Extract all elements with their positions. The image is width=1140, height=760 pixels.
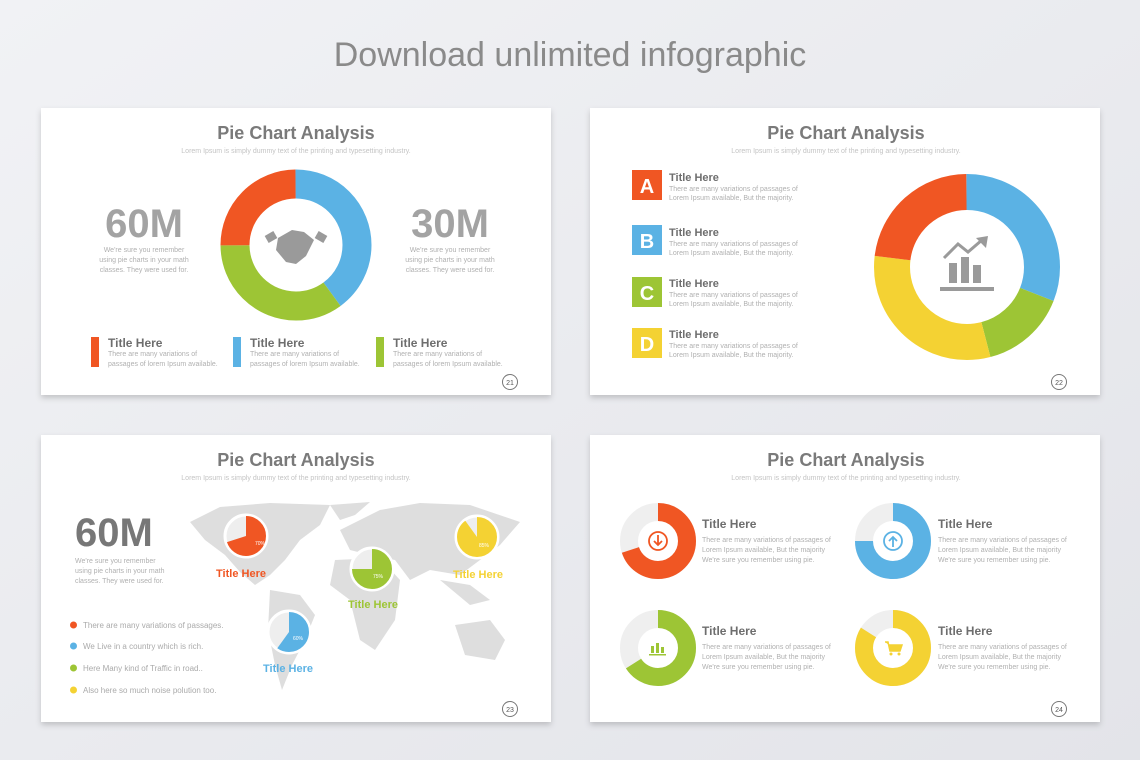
panel: slide 23: 60M: [75, 511, 153, 555]
legend bullets: Also here so much noise polution too.: [83, 686, 216, 695]
panel: slide 21: Lorem Ipsum is simply dummy text of the printing and typesetting industry.: [181, 148, 411, 155]
panel: slide 22: There are many variations of passages of: [669, 241, 798, 248]
pie: yellow 85%: 85%: [479, 543, 490, 549]
panel: slide 24: Pie Chart Analysis: [767, 450, 925, 470]
pie: blue 60%: [263, 611, 313, 675]
panel: slide 21: using pie charts in your math: [99, 257, 189, 264]
panel: slide 22: There are many variations of passages of: [669, 186, 798, 193]
panel: slide 22: There are many variations of passages of: [669, 343, 798, 350]
panel: slide 22: C: [640, 283, 654, 305]
pie: green 75%: 75%: [373, 574, 384, 580]
panel: slide 22: Lorem Ipsum available, But the majority.: [669, 301, 793, 308]
panel: slide 22: Lorem Ipsum available, But the majority.: [669, 352, 793, 359]
panel: slide 22: D: [640, 334, 654, 356]
panel: slide 24: 24: [1055, 707, 1063, 714]
panel: slide 21: passages of lorem Ipsum available.: [250, 361, 360, 368]
panel: slide 24: We're sure you remember using pie.: [938, 557, 1051, 564]
panel: slide 21: classes. They were used for.: [406, 267, 494, 274]
donut: green: [629, 619, 687, 677]
panel: slide 24: We're sure you remember using pie.: [702, 664, 815, 671]
icon: growth chart: [940, 236, 994, 291]
panel: slide 23: Pie Chart Analysis: [217, 450, 375, 470]
pie: green 75%: Title Here: [348, 599, 398, 611]
pie: red 70%: [216, 515, 267, 580]
donut chart: [892, 192, 1042, 342]
panel: slide 23: classes. They were used for.: [75, 578, 164, 585]
panel: slide 22: Title Here: [669, 172, 719, 184]
panel: slide 24: [590, 435, 1100, 722]
panel: slide 24: We're sure you remember using pie.: [938, 664, 1051, 671]
panel: slide 21: 60M: [105, 202, 183, 246]
panel: slide 24: We're sure you remember using pie.: [702, 557, 815, 564]
title: Download unlimited infographic: [334, 36, 806, 74]
donut chart: [235, 184, 357, 306]
pie: yellow 85%: Title Here: [453, 569, 503, 581]
panel: slide 21: Pie Chart Analysis: [217, 123, 375, 143]
panel: slide 23: [41, 435, 551, 722]
panel: slide 21: using pie charts in your math: [405, 257, 495, 264]
donut: blue: [864, 512, 922, 570]
pie: red 70%: Title Here: [216, 568, 266, 580]
panel: slide 21: Title Here: [250, 336, 305, 350]
panel: slide 22: [590, 108, 1100, 395]
panel: slide 24: Title Here: [938, 624, 993, 638]
panel: slide 22: There are many variations of passages of: [669, 292, 798, 299]
icon: handshake: [265, 230, 327, 264]
pie: blue 60%: 60%: [293, 636, 304, 642]
panel: slide 23: Lorem Ipsum is simply dummy text of the printing and typesetting industry.: [181, 475, 411, 482]
panel: slide 21: 21: [506, 380, 514, 387]
panel: slide 21: passages of lorem Ipsum available.: [393, 361, 503, 368]
panel: slide 24: Lorem Ipsum available, But the majority: [938, 654, 1061, 661]
panel: slide 24: Lorem Ipsum is simply dummy text of the printing and typesetting industry.: [731, 475, 961, 482]
panel: slide 24: Lorem Ipsum available, But the majority: [938, 547, 1061, 554]
panel: slide 23: using pie charts in your math: [75, 568, 165, 575]
panel: slide 22: A: [640, 176, 654, 198]
panel: slide 22: Title Here: [669, 278, 719, 290]
panel: slide 24: There are many variations of passages of: [938, 644, 1067, 651]
panel: slide 24: Title Here: [702, 624, 757, 638]
panel: slide 21: Title Here: [393, 336, 448, 350]
panel: slide 24: There are many variations of passages of: [702, 537, 831, 544]
panel: slide 24: Title Here: [938, 517, 993, 531]
legend bullets: There are many variations of passages.: [83, 621, 224, 630]
panel: slide 22: 22: [1055, 380, 1063, 387]
panel: slide 21: classes. They were used for.: [100, 267, 188, 274]
panel: slide 22: B: [640, 231, 654, 253]
panel: slide 21: We're sure you remember: [410, 247, 491, 254]
panel: slide 23: 23: [506, 707, 514, 714]
panel: slide 22: Pie Chart Analysis: [767, 123, 925, 143]
panel: slide 21: There are many variations of: [393, 351, 482, 358]
panel: slide 24: Lorem Ipsum available, But the majority: [702, 654, 825, 661]
panel: slide 21: We're sure you remember: [104, 247, 185, 254]
legend bullets: Here Many kind of Traffic in road..: [83, 664, 203, 673]
pie: red 70%: 70%: [255, 541, 266, 547]
pie: green 75%: [348, 548, 398, 611]
donut: red: [629, 512, 687, 570]
panel: slide 21: Title Here: [108, 336, 163, 350]
panel: slide 24: There are many variations of passages of: [702, 644, 831, 651]
panel: slide 21: There are many variations of: [250, 351, 339, 358]
panel: slide 21: 30M: [411, 202, 489, 246]
panel: slide 21: There are many variations of: [108, 351, 197, 358]
pie: yellow 85%: [453, 516, 503, 581]
panel: slide 21: [41, 108, 551, 395]
panel: slide 22: Title Here: [669, 329, 719, 341]
legend bullets: We Live in a country which is rich.: [83, 642, 203, 651]
panel: slide 21: passages of lorem Ipsum available.: [108, 361, 218, 368]
panel: slide 24: Lorem Ipsum available, But the majority: [702, 547, 825, 554]
world map: [190, 502, 520, 690]
legend bullets: [70, 621, 224, 695]
panel: slide 24: There are many variations of passages of: [938, 537, 1067, 544]
panel: slide 24: Title Here: [702, 517, 757, 531]
panel: slide 22: Lorem Ipsum available, But the majority.: [669, 195, 793, 202]
panel: slide 23: We're sure you remember: [75, 558, 156, 565]
pie: blue 60%: Title Here: [263, 663, 313, 675]
panel: slide 22: Lorem Ipsum is simply dummy text of the printing and typesetting industry.: [731, 148, 961, 155]
panel: slide 22: Lorem Ipsum available, But the majority.: [669, 250, 793, 257]
panel: slide 22: Title Here: [669, 227, 719, 239]
donut: yellow: [864, 619, 922, 677]
